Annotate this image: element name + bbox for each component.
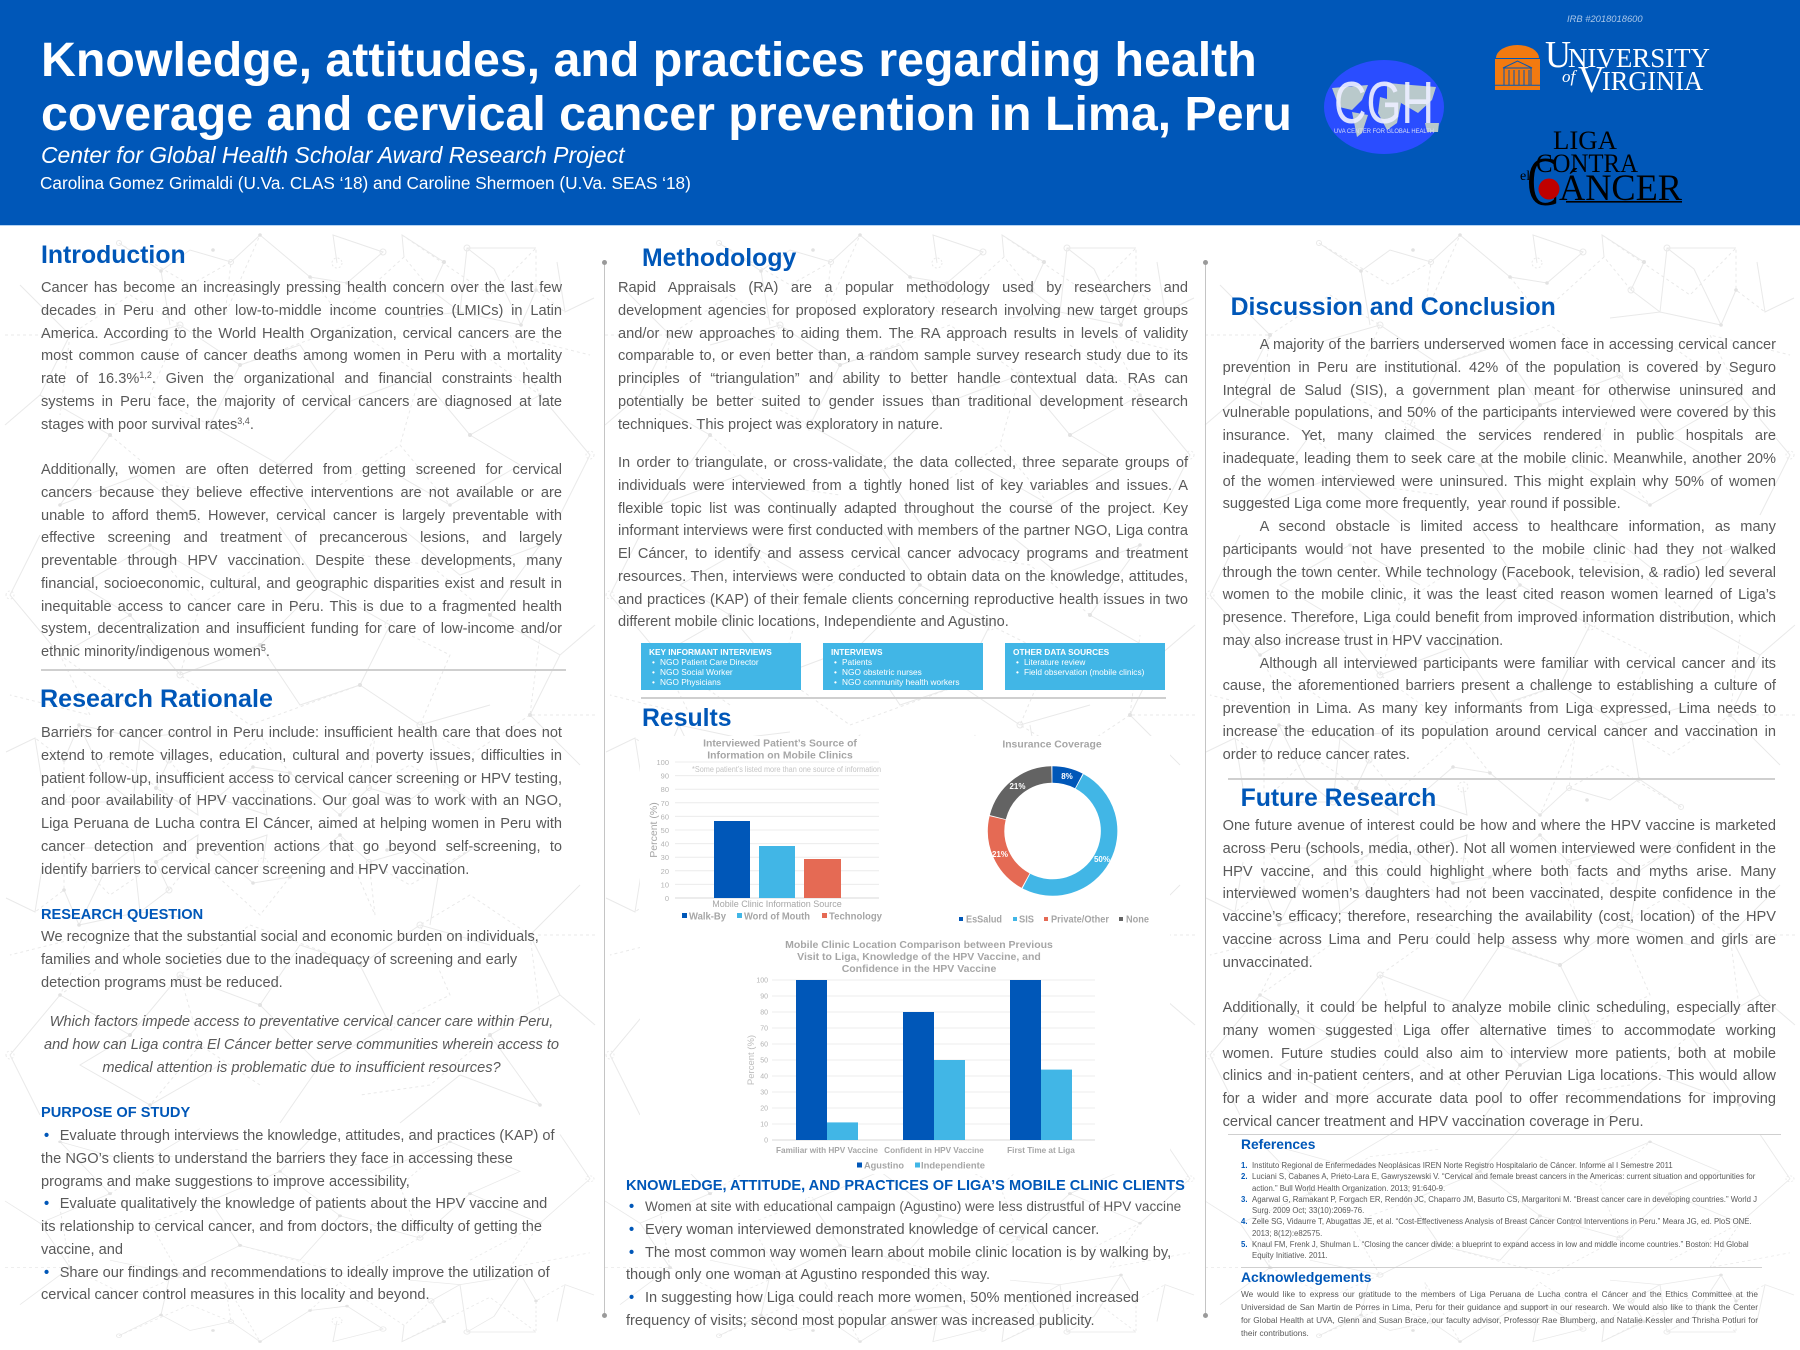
list: KAP findings: • [629,1245,634,1261]
text: methodology body: comparable to, or even better than, a random sample survey research study due to its [618,348,1188,364]
axis ticks [656,758,669,903]
text: introduction body: America. According to the World Health Organization, cervical cancers are the [41,326,562,342]
list: references: 2. [1241,1172,1248,1181]
axis ticks: 80 [661,785,669,794]
text: introduction body: effective screening and treatment of precancerous lesions, and largely [41,530,562,546]
logo: Liga Contra el Cancer [1520,126,1682,221]
axis ticks: 30 [760,1090,768,1096]
text: future research body: One future avenue of interest could be how and where the HPV vaccine is marketed [1223,818,1776,834]
donut chart: insurance coverage [959,740,1149,926]
text: future research body: unvaccinated. [1223,955,1313,971]
list: KAP findings: • [629,1222,634,1238]
logo: Liga Contra el Cancer: el [1520,169,1530,184]
axis ticks: 0 [665,894,669,903]
box: interviews: Patients [842,657,872,667]
list: references: Equity Initiative. 2011. [1252,1251,1328,1260]
text: research question body [41,929,539,991]
legend: None [1126,914,1149,926]
text: acknowledgements body: We would like to express our gratitude to the members of Liga Peruana de Lucha contra el Cáncer and the Ethics Committee at the [1241,1289,1758,1299]
axis ticks: 20 [661,867,669,876]
text: discussion body: inadequate, leading them to seek care at the mobile clinic. Meanwhile, another 20% [1223,451,1776,467]
logo: Liga Contra el Cancer: C [1527,144,1559,221]
chart title: Mobile Clinic Location Comparison between Previous [785,939,1053,951]
text: discussion body: women to the mobile clinic, it was the least cited reason women learned of Liga’s [1223,587,1776,603]
text: rationale body: patient follow-up, insufficient access to cervical cancer screening or HPV testing, [41,771,562,787]
list: references: 5. [1241,1240,1248,1249]
text: rationale body [41,725,562,878]
list: purpose of study: Evaluate through interviews the knowledge, attitudes, and practices (KAP) of [60,1128,555,1144]
text: introduction body: inequitable access to cancer care in Peru. This is due to a fragmented health [41,599,562,615]
list: references: Instituto Regional de Enfermedades Neoplásicas IREN Norte Registro Hospitalario de Cáncer. Informe al I Semestre 2011 [1252,1161,1673,1170]
legend [857,1160,985,1172]
text: methodology body: development agencies for proposed exploratory research involving new target groups [618,303,1188,319]
axis ticks: 90 [661,772,669,781]
panel: discussion and conclusion [1222,294,1776,763]
bar chart: source of information: Mobile Clinic Information Source [712,899,842,909]
list: references: Luciani S, Cabanes A, Prieto-Lara E, Gawryszewski V. “Cervical and female breast cancers in the Americas: current situation and opportunities for [1252,1172,1755,1181]
text: acknowledgements body [1241,1289,1758,1338]
text: introduction body: cancers because they believe effective interventions are not available or are [41,485,562,501]
box: other data sources: OTHER DATA SOURCES [1013,647,1109,657]
list: purpose of study: • [44,1265,49,1281]
heading: Results: Results [642,705,732,732]
axis ticks: 80 [760,1010,768,1016]
legend: Word of Mouth [744,912,810,922]
box: other data sources [1005,643,1165,690]
text: introduction body: systems in Peru face, the majority of cervical cancers are diagnosed at late [41,394,562,410]
text: discussion body: vulnerable populations, and 50% of the participants interviewed were covered by this [1223,405,1776,421]
bar chart: source of information [648,738,882,922]
box: interviews: NGO obstetric nurses [842,667,922,677]
text: methodology triangulation: informant interviews were first conducted with members of the partner NGO, Liga contra [618,523,1188,539]
text: future research body: across Peru (schools, media, other). Not all women interviewed were confident in the [1223,841,1776,857]
list: references: 3. [1241,1195,1248,1204]
text: future research body: HPV vaccine, and this could highlight where both facts and myths arise. Many [1223,864,1776,880]
text: discussion body: A majority of the barriers underserved women face in accessing cervical cancer [1260,337,1776,353]
list: purpose of study: its relationship to cervical cancer, and from doctors, the difficulty of getting the [41,1219,542,1235]
text: introduction body: unable to afford them5. However, cervical cancer is largely preventable with [41,508,562,524]
text: research question in italics: medical attention is problematic due to insufficient resources? [102,1060,501,1076]
legend: Independiente [921,1160,985,1172]
text: discussion body: order to reduce cancer rates. [1223,747,1410,763]
text: discussion body: suggested Liga come more frequently, year round if possible. [1223,496,1621,512]
text: research question body: detection programs must be reduced. [41,975,283,991]
title [41,33,1292,141]
list: references: 2013; 8(12):e82575. [1252,1229,1322,1238]
bar chart: mobile clinic location comparison: Percent (%) [746,1035,757,1085]
logo: UVA Center for Global Health: CGH [1334,70,1434,136]
heading: References: References [1241,1137,1315,1152]
bar chart: source of information: *Some patient’s listed more than one source of information [692,765,881,774]
panel: research rationale [40,685,562,1303]
text: research question body: We recognize that the substantial social and economic burden on individuals, [41,929,539,945]
list: references: Zelle SG, Vidaurre T, Abugattas JE, et al. “Cost-Effectiveness Analysis of Breast Cancer Control Interventions in Peru.” Meara JG, ed. PloS ONE. [1252,1217,1752,1226]
panel: methodology [618,245,1188,690]
text: research question in italics [44,1014,559,1076]
text: future research body: vaccine across Lima and Peru could help assess why more women and girls are [1223,932,1776,948]
heading: Methodology: Methodology [642,245,796,272]
text: future research body [1222,818,1776,1130]
text: methodology triangulation: resources. Then, interviews were conducted to obtain data on the knowledge, attitudes, [618,569,1188,585]
legend [959,914,1149,926]
authors: Carolina Gomez Grimaldi (U.Va. CLAS ‘18) and Caroline Shermoen (U.Va. SEAS ‘18) [40,172,691,192]
axis ticks: 90 [760,994,768,1000]
heading: research question: RESEARCH QUESTION [41,907,203,923]
logo: UVA Center for Global Health: UVA CENTER FOR GLOBAL HEALTH [1334,129,1434,135]
axis ticks: 60 [760,1042,768,1048]
text: discussion body: prevention in Peru are institutional. 42% of the population is covered by Seguro [1223,360,1776,376]
list: KAP findings: In suggesting how Liga could reach more women, 50% mentioned increased [645,1290,1139,1306]
list: references: Surg. 2009 Oct; 33(10):2069-76. [1252,1206,1364,1215]
text: introduction body: ethnic minority/indigenous women5. [41,643,270,660]
legend: Walk-By [689,912,726,922]
text: future research body: clinics and in-patient centers, and at other Peruvian Liga locations. This would allow [1223,1068,1776,1084]
category labels: Familiar with HPV Vaccine [776,1146,878,1155]
text: discussion body: increase the education of its population around cervical cancer and vaccination in [1223,724,1776,740]
list: KAP findings: The most common way women learn about mobile clinic location is by walking by, [645,1245,1171,1261]
axis ticks: 20 [760,1106,768,1112]
text: discussion body: Although all interviewed participants were familiar with cervical cancer and its [1260,656,1776,672]
title: Knowledge, attitudes, and practices regarding health [41,33,1257,87]
list: references: 4. [1241,1217,1248,1226]
header banner [0,0,1800,226]
text: methodology body: Rapid Appraisals (RA) are a popular methodology used by researchers and [618,280,1188,296]
donut chart: insurance coverage: 21% [992,850,1008,859]
list: KAP findings: • [629,1199,634,1215]
list: purpose of study: vaccine, and [41,1242,123,1258]
panel: acknowledgements [1241,1269,1758,1338]
axis ticks: 70 [760,1026,768,1032]
bars [796,980,1072,1140]
text: methodology triangulation: different mobile clinic locations, Independiente and Agustino. [618,614,1009,630]
text: introduction body: stages with poor survival rates3,4. [41,416,254,433]
text: research question in italics: and how can Liga contra El Cáncer better serve communities wherein access to [44,1037,559,1053]
subtitle: Center for Global Health Scholar Award Research Project [41,142,625,168]
logo: University of Virginia: V [1578,59,1606,101]
text: rationale body: and poor availability of HPV vaccinations. Our goal was to work with an NGO, [41,793,562,809]
text: methodology triangulation: flexible topic list was continually adapted throughout the course of the project. Key [618,501,1188,517]
text: discussion body: prevention in Lima. As many key informants from Liga expressed, Lima needs to [1223,701,1776,717]
axis ticks [756,978,768,1144]
text: methodology body: principles of “triangulation” and ability to better handle contextual data. RAs can [618,371,1188,387]
text: discussion body: Integral de Salud (SIS), a government plan meant for otherwise uninsured and [1223,383,1776,399]
box: key informant interviews: KEY INFORMANT INTERVIEWS [649,647,772,657]
heading: Acknowledgements: Acknowledgements [1241,1269,1371,1285]
list: references: 1. [1241,1161,1248,1170]
IRB number: IRB #2018018600 [1567,13,1643,24]
text: methodology triangulation: individuals were interviewed from a tightly honed list of key variables and issues. A [618,478,1188,494]
text: discussion body: presence. Therefore, Liga could benefit from improved information distribution, which [1223,610,1776,626]
text: rationale body: cancer detection and prevention actions that go beyond self-screening, to [41,839,562,855]
text: future research body: vaccine’s efficacy; therefore, researching the availability (cost, location) of the HPV [1223,909,1776,925]
box: interviews [823,643,983,690]
text: rationale body: Liga Peruana de Lucha contra El Cáncer, aimed at helping women in Peru with [41,816,562,832]
logo: University of Virginia: U [1545,34,1571,76]
text: future research body: women. Future studies could also aim to interview more patients, both at mobile [1223,1046,1776,1062]
legend: Private/Other [1051,914,1109,926]
legend: Technology [829,912,882,922]
text: introduction body: Additionally, women are often deterred from getting screened for cervical [41,462,562,478]
panel: references [1241,1137,1757,1260]
list: purpose of study: cervical cancer control measures in this locality and beyond. [41,1287,430,1303]
box: key informant interviews [641,643,801,690]
list: purpose of study: Share our findings and recommendations to ideally improve the utilization of [60,1265,550,1281]
axis ticks: 30 [661,853,669,862]
text: discussion body: of the women interviewed were uninsured. This might explain why 50% of women [1223,474,1776,490]
text: acknowledgements body: for Global Health at UVA, Glenn and Susan Brace, our faculty advisor, Professor Rae Blumberg, and Natalie Kessler and Thrisha Potluri for [1241,1315,1758,1325]
box: interviews: NGO community health workers [842,677,960,687]
text: future research body: for a wider and more accurate data pool to offer recommendations for improving [1223,1091,1776,1107]
text: introduction body: rate of 16.3%1,2. Given the organizational and financial constraints health [41,370,562,387]
list: KAP findings [626,1199,1181,1329]
text: discussion body: insurance. Yet, many claimed the services rendered in public hospitals are [1223,428,1776,444]
text: methodology triangulation: El Cáncer, to identify and assess cervical cancer advocacy programs and treatment [618,546,1188,562]
list: KAP findings: though only one woman at Agustino responded this way. [626,1267,990,1283]
text: methodology triangulation [618,455,1188,630]
category labels: First Time at Liga [1007,1146,1075,1155]
list: references: action.” Bull World Health Organization. 2013; 91:640-9. [1252,1184,1445,1193]
bar chart: mobile clinic location comparison [746,939,1095,1172]
logo: Liga Contra el Cancer: ÁNCER [1559,167,1682,209]
chart title [785,939,1053,975]
box: key informant interviews: NGO Physicians [660,677,721,687]
donut segments [976,754,1129,908]
heading: KAP: KNOWLEDGE, ATTITUDE, AND PRACTICES OF LIGA’S MOBILE CLINIC CLIENTS [626,1178,1185,1194]
text: discussion body: cause, the aforementioned barriers present a challenge to establishing a culture of [1223,678,1776,694]
panel: KAP findings [626,1178,1185,1329]
list: purpose of study: Evaluate qualitatively the knowledge of patients about the HPV vaccine and [60,1196,547,1212]
text: methodology triangulation: and practices (KAP) of their female clients concerning reproductive health issues in two [618,592,1188,608]
list: purpose of study [41,1128,555,1303]
list: purpose of study: • [44,1196,49,1212]
legend: Agustino [864,1160,904,1172]
chart title: Information on Mobile Clinics [707,750,853,762]
text: methodology body: potentially be better suited to gender issues than traditional development research [618,394,1188,410]
title: coverage and cervical cancer prevention in Lima, Peru [41,87,1292,141]
list: KAP findings: frequency of visits; second most popular answer was increased publicity. [626,1313,1095,1329]
bars [714,821,841,898]
box: other data sources: Field observation (mobile clinics) [1024,667,1144,677]
list: KAP findings: • [629,1290,634,1306]
list: references: Agarwal G, Ramakant P, Forgach ER, Rendón JC, Chaparro JM, Basurto CS, Margaritoni M. “Breast cancer care in developing countries.” World J [1252,1195,1757,1204]
axis ticks: 100 [656,758,669,767]
heading: Introduction: Introduction [41,242,186,269]
heading: purpose of study: PURPOSE OF STUDY [41,1105,190,1121]
logo: UVA Center for Global Health [1324,60,1444,154]
text: research question body: families and whole societies due to the inadequacy of screening and early [41,952,517,968]
list: references: Knaul FM, Frenk J, Shulman L. “Closing the cancer divide: a blueprint to expand access in low and middle income countries.” Boston: Hd Global [1252,1240,1749,1249]
logo: University of Virginia: NIVERSITY [1568,43,1710,73]
list: KAP findings: Every woman interviewed demonstrated knowledge of cervical cancer. [645,1222,1099,1238]
chart title: Interviewed Patient’s Source of [703,738,857,750]
legend: EsSalud [966,914,1002,926]
axis ticks: 10 [760,1122,768,1128]
axis ticks: 40 [661,840,669,849]
heading: Discussion and Conclusion: Discussion and Conclusion [1231,294,1556,321]
donut chart: insurance coverage: 50% [1094,855,1110,864]
chart title: Visit to Liga, Knowledge of the HPV Vaccine, and [797,951,1041,963]
text: introduction body: financial, socioeconomic, cultural, and geographic disparities exist and result in [41,576,562,592]
text: discussion body: may also increase trust in HPV vaccination. [1223,633,1503,649]
axis ticks: 50 [661,826,669,835]
text: discussion body: participants would not have presented to the mobile clinic had they not walked [1223,542,1776,558]
text: introduction body: most common cause of cancer deaths among women in Peru with a mortality [41,348,562,364]
legend: SIS [1019,914,1034,926]
axis ticks: 0 [764,1138,768,1144]
box: key informant interviews: NGO Patient Care Director [660,657,759,667]
axis ticks: 60 [661,812,669,821]
text: introduction body [41,280,562,660]
text: methodology triangulation: In order to triangulate, or cross-validate, the data collected, three separate groups of [618,455,1188,471]
donut chart: insurance coverage: 21% [1009,782,1026,791]
list: purpose of study: programs and make suggestions to improve accessibility, [41,1174,410,1190]
text: discussion body [1222,337,1776,763]
chart title: Confidence in the HPV Vaccine [842,963,996,975]
bar chart: source of information: Percent (%) [648,802,660,858]
legend [682,912,882,922]
text: future research body: cervical cancer treatment and HPV vaccination coverage in Peru. [1223,1114,1644,1130]
text: methodology body [618,280,1188,433]
axis ticks: 70 [661,799,669,808]
logo: University of Virginia: of [1562,67,1578,86]
text: introduction body: preventable through HPV vaccination. Despite these developments, many [41,553,562,569]
text: future research body: many women suggested Liga offer alternative times to accommodate working [1223,1023,1776,1039]
box: key informant interviews: NGO Social Worker [660,667,733,677]
heading: Research Rationale: Research Rationale [40,685,273,713]
chart title [703,738,857,762]
panel: future research [1222,785,1776,1130]
axis ticks: 100 [756,978,768,984]
text: methodology body: techniques. This project was exploratory in nature. [618,417,943,433]
panel: introduction [41,242,562,660]
category labels: Confident in HPV Vaccine [884,1146,984,1155]
logo: Liga Contra el Cancer: CONTRA [1536,149,1638,178]
list: references [1241,1161,1757,1260]
text: introduction body: Cancer has become an increasingly pressing health concern over the last few [41,280,562,296]
logo: University of Virginia: IRGINIA [1602,66,1703,96]
text: future research body: interviewed women’s daughters had not been vaccinated, despite confidence in the [1223,886,1776,902]
text: introduction body: system, decentralization and insufficient funding for care of low-income and/or [41,621,562,637]
text: discussion body: through the town center. While technology (Facebook, television, & radio) led several [1223,565,1776,581]
text: future research body: Additionally, it could be helpful to analyze mobile clinic scheduling, especially after [1223,1000,1776,1016]
text: acknowledgements body: Universidad de San Martin de Porres in Lima, Peru for their guidance and support in our research. We would also like to thank the Center [1241,1302,1758,1312]
list: purpose of study: the NGO’s clients to understand the barriers they face in accessing these [41,1151,513,1167]
text: methodology body: and/or new approaches to aiding them. The RA approach results in levels of validity [618,326,1188,342]
list: purpose of study: • [44,1128,49,1144]
chart title: Insurance Coverage [1002,740,1102,750]
text: introduction body: decades in Peru and other low-to-middle income countries (LMICs) in Latin [41,303,562,319]
donut chart: insurance coverage: 8% [1061,772,1073,781]
axis ticks: 40 [760,1074,768,1080]
box: interviews: INTERVIEWS [831,647,882,657]
box: other data sources: Literature review [1024,657,1085,667]
logo: Liga Contra el Cancer: LIGA [1553,126,1617,155]
text: rationale body: extend to remote villages, education, cultural and poverty issues, difficulties in [41,748,562,764]
text: rationale body: Barriers for cancer control in Peru include: insufficient health care that does not [41,725,562,741]
logo: University of Virginia [1495,34,1710,101]
text: discussion body: A second obstacle is limited access to healthcare information, as many [1260,519,1776,535]
category labels [776,1146,1075,1155]
axis ticks: 10 [661,880,669,889]
text: rationale body: identify barriers to cervical cancer screening and HPV vaccination. [41,862,469,878]
text: research question in italics: Which factors impede access to preventative cervical cancer care within Peru, [50,1014,553,1030]
heading: Future Research: Future Research [1241,785,1436,812]
text: acknowledgements body: their contributions. [1241,1328,1309,1338]
axis ticks: 50 [760,1058,768,1064]
list: KAP findings: Women at site with educational campaign (Agustino) were less distrustful of HPV vaccine [645,1199,1181,1214]
